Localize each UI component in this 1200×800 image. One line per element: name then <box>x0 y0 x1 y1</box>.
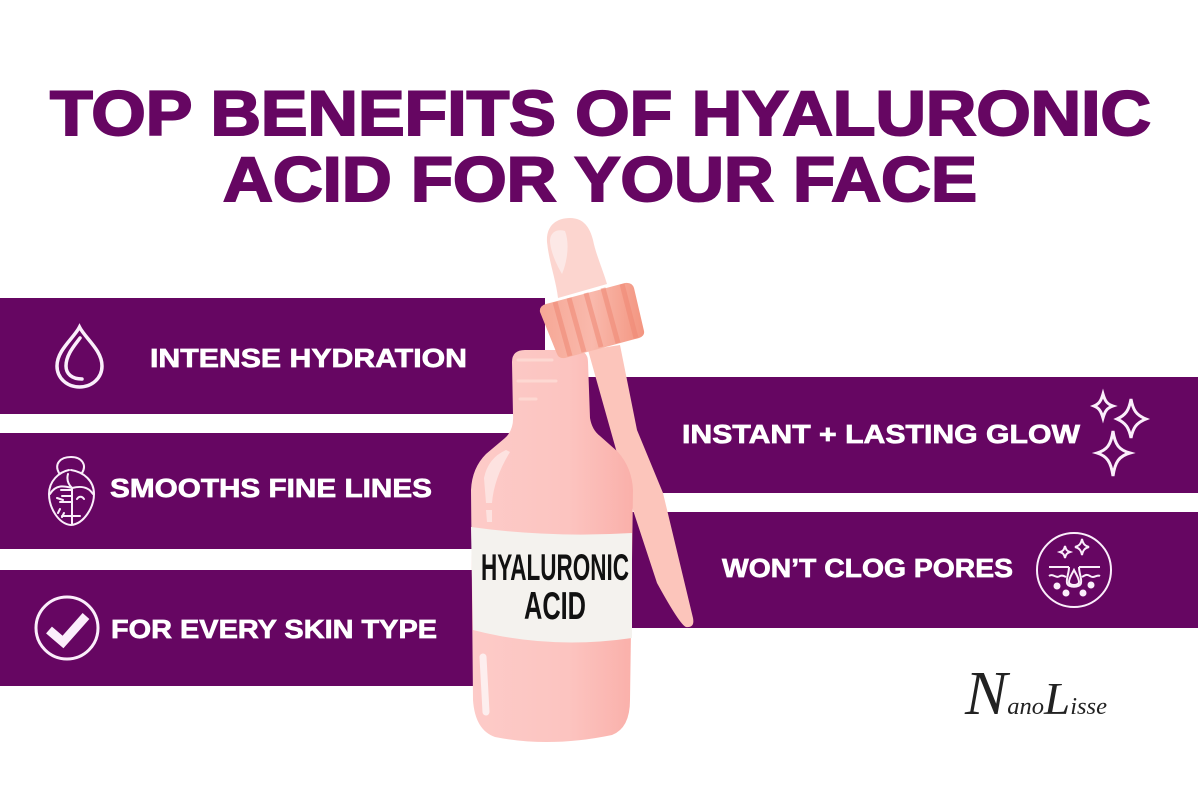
label: instant + lasting glow: INSTANT + LASTING GLOW <box>682 419 1081 449</box>
bottle lower highlight <box>483 657 486 712</box>
label: smooths fine lines: SMOOTHS FINE LINES <box>110 473 432 503</box>
icon: check mark in circle <box>36 597 98 659</box>
icon: pore in circle <box>1037 533 1111 607</box>
label: for every skin type: FOR EVERY SKIN TYPE <box>111 614 437 644</box>
illustration: hyaluronic acid bottle <box>471 218 693 742</box>
icon: sparkles <box>1094 394 1146 476</box>
label: won't clog pores: WON’T CLOG PORES <box>722 553 1013 583</box>
dropper tube <box>588 345 693 627</box>
bottle upper highlight <box>484 450 510 522</box>
bottle label: ACID <box>524 585 586 628</box>
bottle label <box>471 527 632 642</box>
bottle body <box>471 350 633 742</box>
bottle neck highlight <box>518 360 556 399</box>
dropper bulb <box>547 218 607 298</box>
panel: won't clog pores <box>620 512 1198 628</box>
panel: intense hydration <box>0 298 545 414</box>
panel: instant + lasting glow <box>585 377 1198 493</box>
label: intense hydration: INTENSE HYDRATION <box>150 343 467 373</box>
title <box>50 79 1151 215</box>
panel: for every skin type <box>0 570 500 686</box>
dropper cap <box>540 283 644 358</box>
logo: NanoLisse signature: NanoLisse <box>964 660 1107 728</box>
panel: smooths fine lines <box>0 433 520 549</box>
icon: face <box>49 457 94 525</box>
title: ACID FOR YOUR FACE <box>223 145 977 215</box>
icon: water drop <box>57 327 102 387</box>
bottle label: HYALURONIC <box>481 547 629 588</box>
title: TOP BENEFITS OF HYALURONIC <box>50 79 1151 149</box>
